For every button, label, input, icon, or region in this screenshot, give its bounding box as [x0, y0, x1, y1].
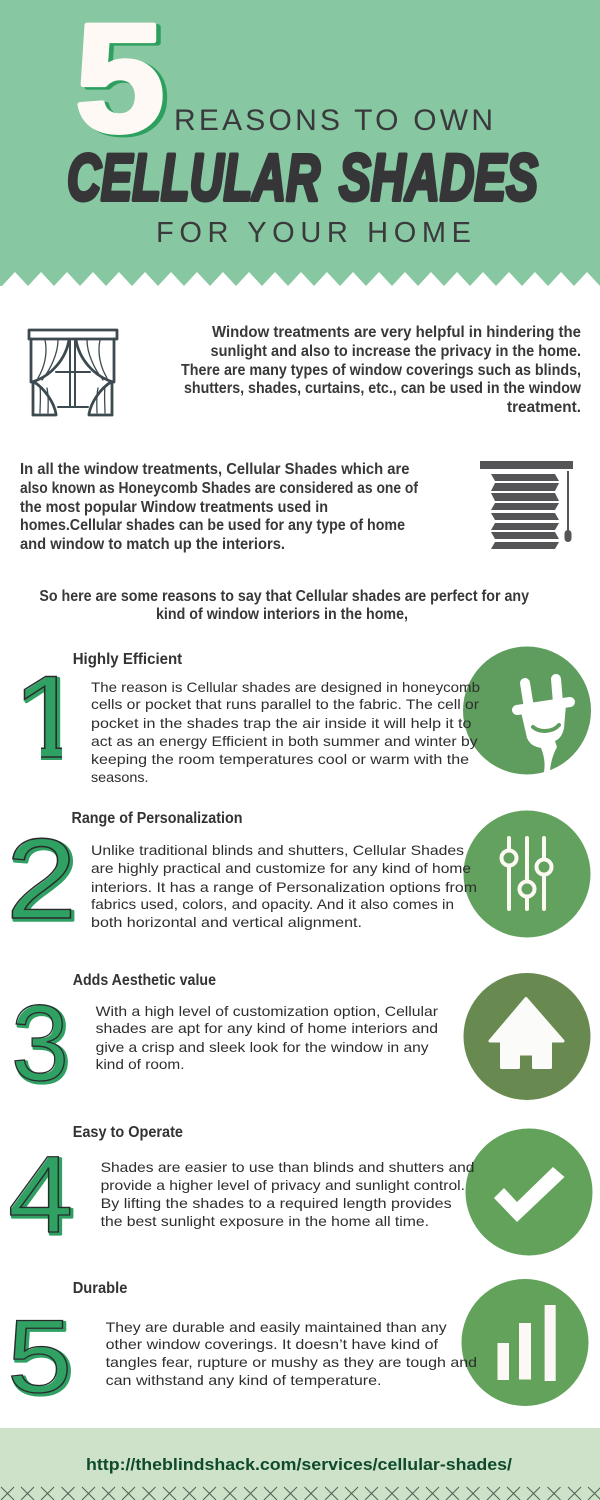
numeral 5: 5: [7, 1299, 72, 1415]
numeral 5: 5: [9, 1301, 74, 1417]
panel: reason 1 highly efficient: [12, 646, 591, 785]
intro paragraph 2: homes.Cellular shades can be used for any type of home: [20, 517, 405, 534]
text: personalization body: both horizontal and vertical alignment.: [91, 914, 362, 930]
intro paragraph 3: [39, 588, 529, 623]
text: durable body: [106, 1319, 477, 1388]
text: personalization body: Unlike traditional blinds and shutters, Cellular Shades: [91, 842, 464, 858]
text: highly efficient body: cells or pocket that runs parallel to the fabric. The cell or: [91, 696, 479, 712]
icon: bar chart: [462, 1279, 588, 1406]
text: easy to operate body: [101, 1159, 474, 1229]
title: cellular shades: CELLULAR: [67, 140, 320, 214]
text: highly efficient body: [91, 679, 480, 785]
intro paragraph 3: So here are some reasons to say that Cellular shades are perfect for any: [39, 588, 529, 605]
intro paragraph 3: kind of window interiors in the home,: [156, 606, 408, 623]
intro paragraph 1: [181, 324, 581, 416]
numeral 2: 2: [6, 814, 77, 943]
text: highly efficient body: seasons.: [91, 769, 148, 785]
intro paragraph 2: and window to match up the interiors.: [20, 536, 285, 553]
panel: reason 4 easy to operate: [8, 1124, 592, 1257]
text: easy to operate body: the best sunlight exposure in the home all time.: [101, 1213, 429, 1229]
intro paragraph 2: the most popular Window treatments used in: [20, 499, 328, 516]
panel: reason 3 adds aesthetic value: [11, 972, 590, 1105]
footer band: [0, 1428, 600, 1500]
text: aesthetic body: [96, 1003, 438, 1072]
text: durable body: tangles fear, rupture or mushy as they are tough and: [106, 1354, 477, 1370]
text: aesthetic body: With a high level of customization option, Cellular: [96, 1003, 438, 1019]
footer cross pattern: [1, 1487, 600, 1500]
icon: curtained window: [29, 330, 117, 415]
heading: range of personalization: Range of Personalization: [72, 810, 242, 827]
text: aesthetic body: shades are apt for any kind of home interiors and: [96, 1020, 438, 1036]
numeral 2: 2: [8, 816, 79, 945]
heading: adds aesthetic value: Adds Aesthetic value: [73, 972, 216, 989]
numeral 3: 3: [13, 985, 71, 1105]
numeral 1: [24, 676, 62, 760]
text: aesthetic body: kind of room.: [96, 1056, 184, 1072]
text: personalization body: are highly practical and customize for any kind of home: [91, 860, 471, 876]
heading: durable: Durable: [73, 1280, 127, 1297]
icon: house: [464, 973, 590, 1100]
text: highly efficient body: keeping the room temperatures cool or warm with the: [91, 751, 469, 767]
text: durable body: other window coverings. It doesn’t have kind of: [106, 1336, 438, 1352]
text: personalization body: [91, 842, 477, 930]
intro paragraph 1: treatment.: [507, 399, 581, 416]
title: reasons to own: REASONS TO OWN: [174, 104, 493, 137]
numeral 4: 4: [10, 1136, 75, 1257]
intro paragraph 2: also known as Honeycomb Shades are considered as one of: [20, 480, 419, 497]
title: for your home: FOR YOUR HOME: [156, 217, 471, 249]
numeral 4: 4: [8, 1134, 73, 1255]
intro paragraph 2: [20, 461, 419, 553]
footer link: http://theblindshack.com/services/cellular-shades/: [86, 1455, 512, 1474]
heading: highly efficient: Highly Efficient: [73, 651, 183, 668]
icon: sliders: [464, 810, 590, 938]
icon: plug: [463, 646, 591, 774]
intro paragraph 1: Window treatments are very helpful in hindering the: [212, 324, 581, 341]
text: highly efficient body: act as an energy Efficient in both summer and winter by: [91, 733, 478, 749]
text: easy to operate body: By lifting the shades to a required length provides: [101, 1195, 452, 1211]
heading: easy to operate: Easy to Operate: [73, 1124, 183, 1141]
panel: reason 5 durable: [7, 1279, 588, 1417]
text: easy to operate body: Shades are easier to use than blinds and shutters and: [101, 1159, 474, 1175]
icon: cellular blind: [480, 461, 573, 549]
icon: check mark: [466, 1128, 592, 1256]
intro paragraph 2: In all the window treatments, Cellular Shades which are: [20, 461, 410, 478]
numeral 1: 1: [14, 654, 86, 785]
text: personalization body: fabrics used, colors, and opacity. And it also comes in: [91, 896, 454, 912]
text: durable body: can withstand any kind of temperature.: [106, 1372, 381, 1388]
text: easy to operate body: provide a higher level of privacy and sunlight control.: [101, 1177, 465, 1193]
text: durable body: They are durable and easily maintained than any: [106, 1319, 447, 1335]
header band: [0, 0, 600, 286]
numeral 3: 3: [11, 983, 69, 1103]
text: aesthetic body: give a crisp and sleek look for the window in any: [96, 1039, 429, 1055]
panel: reason 2 range of personalization: [6, 810, 590, 945]
text: highly efficient body: pocket in the shades trap the air inside it will help it to: [91, 715, 472, 731]
text: highly efficient body: The reason is Cellular shades are designed in honeycomb: [91, 679, 480, 695]
text: personalization body: interiors. It has a range of Personalization options from: [91, 879, 477, 895]
numeral 1: 1: [12, 652, 84, 783]
